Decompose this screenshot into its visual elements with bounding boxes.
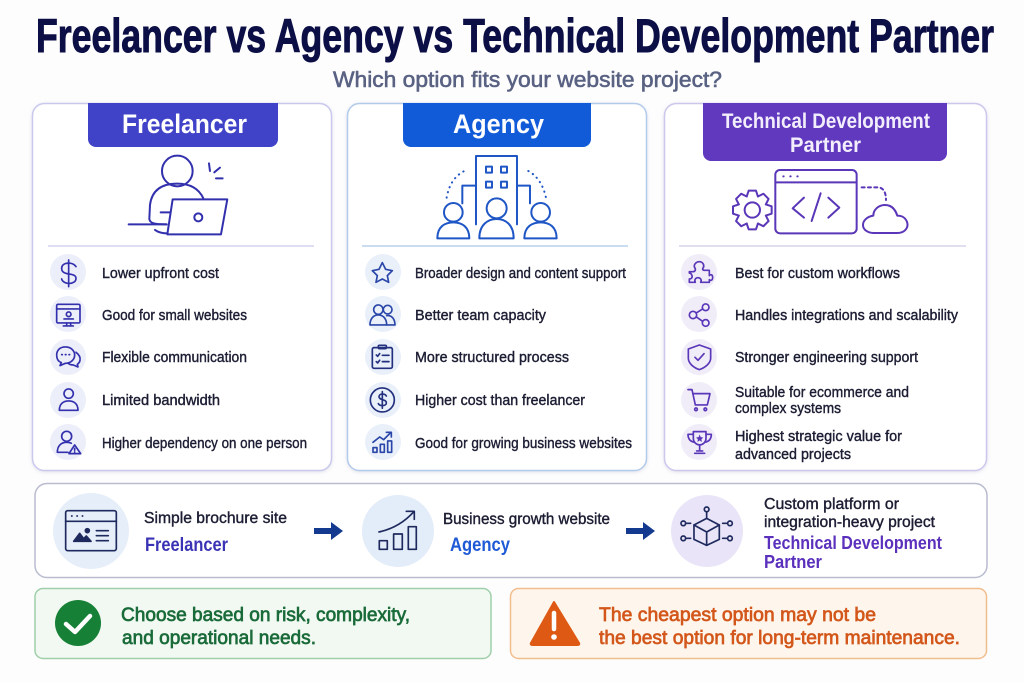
list item: custom workflows: Best for custom workflows [735,265,900,282]
step: custom platform: Partner [764,552,822,572]
step: custom platform: integration-heavy project [764,514,936,531]
list item: engineering support [681,339,919,375]
step: brochure site: Simple brochure site [144,510,287,527]
list item: better team capacity: Better team capacity [415,307,546,324]
panel: technical development partner [664,103,986,470]
callout: orange warning: The cheapest option may not be [599,604,876,626]
step: custom platform: Technical Development [764,533,942,553]
list item: strategic value: advanced projects [735,446,851,463]
callout: orange warning [510,588,986,658]
icon: person at laptop [129,156,227,234]
icon: connected cube [681,507,732,545]
list item: custom workflows [681,254,900,290]
list item: broader support [365,254,627,290]
list item: better team capacity [365,296,546,332]
card background [664,104,986,470]
step: custom platform [671,495,942,572]
card background [348,104,646,470]
step: custom platform: Custom platform or [764,496,899,513]
icon: web page [66,511,116,551]
subtitle: Which option fits your website project? [333,67,722,92]
step: brochure site [53,493,287,569]
list item: integrations and scalability: Handles integrations and scalability [735,307,958,324]
icon: growth chart [379,511,416,549]
list item: flexible communication [50,339,247,375]
callout: green advice: Choose based on risk, complexity, [121,604,410,626]
heading tab: Agency: Agency [453,109,544,139]
arrow [626,522,655,540]
icon: check mark [55,600,101,646]
list item: ecommerce [681,382,909,418]
panel: project path strip [35,484,987,578]
list item: ecommerce: Suitable for ecommerce and [735,384,909,401]
list item: engineering support: Stronger engineering support [735,349,919,366]
callout: orange warning: the best option for long-term maintenance. [599,627,960,649]
list item: higher dependency [50,424,307,460]
list item: strategic value [681,424,902,463]
heading tab: Freelancer: Freelancer [122,109,247,139]
icon part: gear [733,191,772,229]
list item: structured process [365,339,569,375]
list item: good for small websites [50,296,247,332]
panel: agency [348,103,646,470]
list item: ecommerce: complex systems [735,400,841,417]
step: business growth: Agency [450,535,510,556]
icon: warning triangle [531,602,579,645]
panel: freelancer [32,103,332,470]
list item: higher cost: Higher cost than freelancer [415,392,585,409]
card background [32,104,332,470]
heading tab: Technical Development Partner: Partner [790,134,861,157]
list item: growing business: Good for growing business websites [415,435,632,452]
list item: flexible communication: Flexible communication [102,349,247,366]
heading tab: Technical Development Partner [703,103,947,161]
step: business growth: Business growth website [443,511,610,528]
icon: office building with team [437,156,557,238]
list item: higher dependency: Higher dependency on one person [102,435,307,452]
list item: lower upfront cost [50,254,220,290]
list item: broader support: Broader design and content support [415,265,627,282]
step: brochure site: Freelancer [145,535,229,556]
list item: growing business [365,424,632,460]
icon: gear, code window and cloud [733,170,907,233]
list item: structured process: More structured process [415,349,569,366]
heading tab: Technical Development Partner: Technical Development [722,110,930,133]
arrow [314,522,343,540]
callout: green advice: and operational needs. [122,627,316,649]
strip background [35,484,987,578]
heading tab: Freelancer [88,103,278,147]
list item: integrations and scalability [681,296,958,332]
list item: limited bandwidth [50,382,220,418]
list item: lower upfront cost: Lower upfront cost [102,265,220,282]
list item: higher cost [365,382,585,418]
callout: green advice [35,588,491,658]
list item: good for small websites: Good for small websites [102,307,247,324]
heading tab: Agency [403,103,591,147]
step: business growth [362,495,610,567]
list item: limited bandwidth: Limited bandwidth [102,392,220,409]
list item: strategic value: Highest strategic value for [735,428,902,445]
